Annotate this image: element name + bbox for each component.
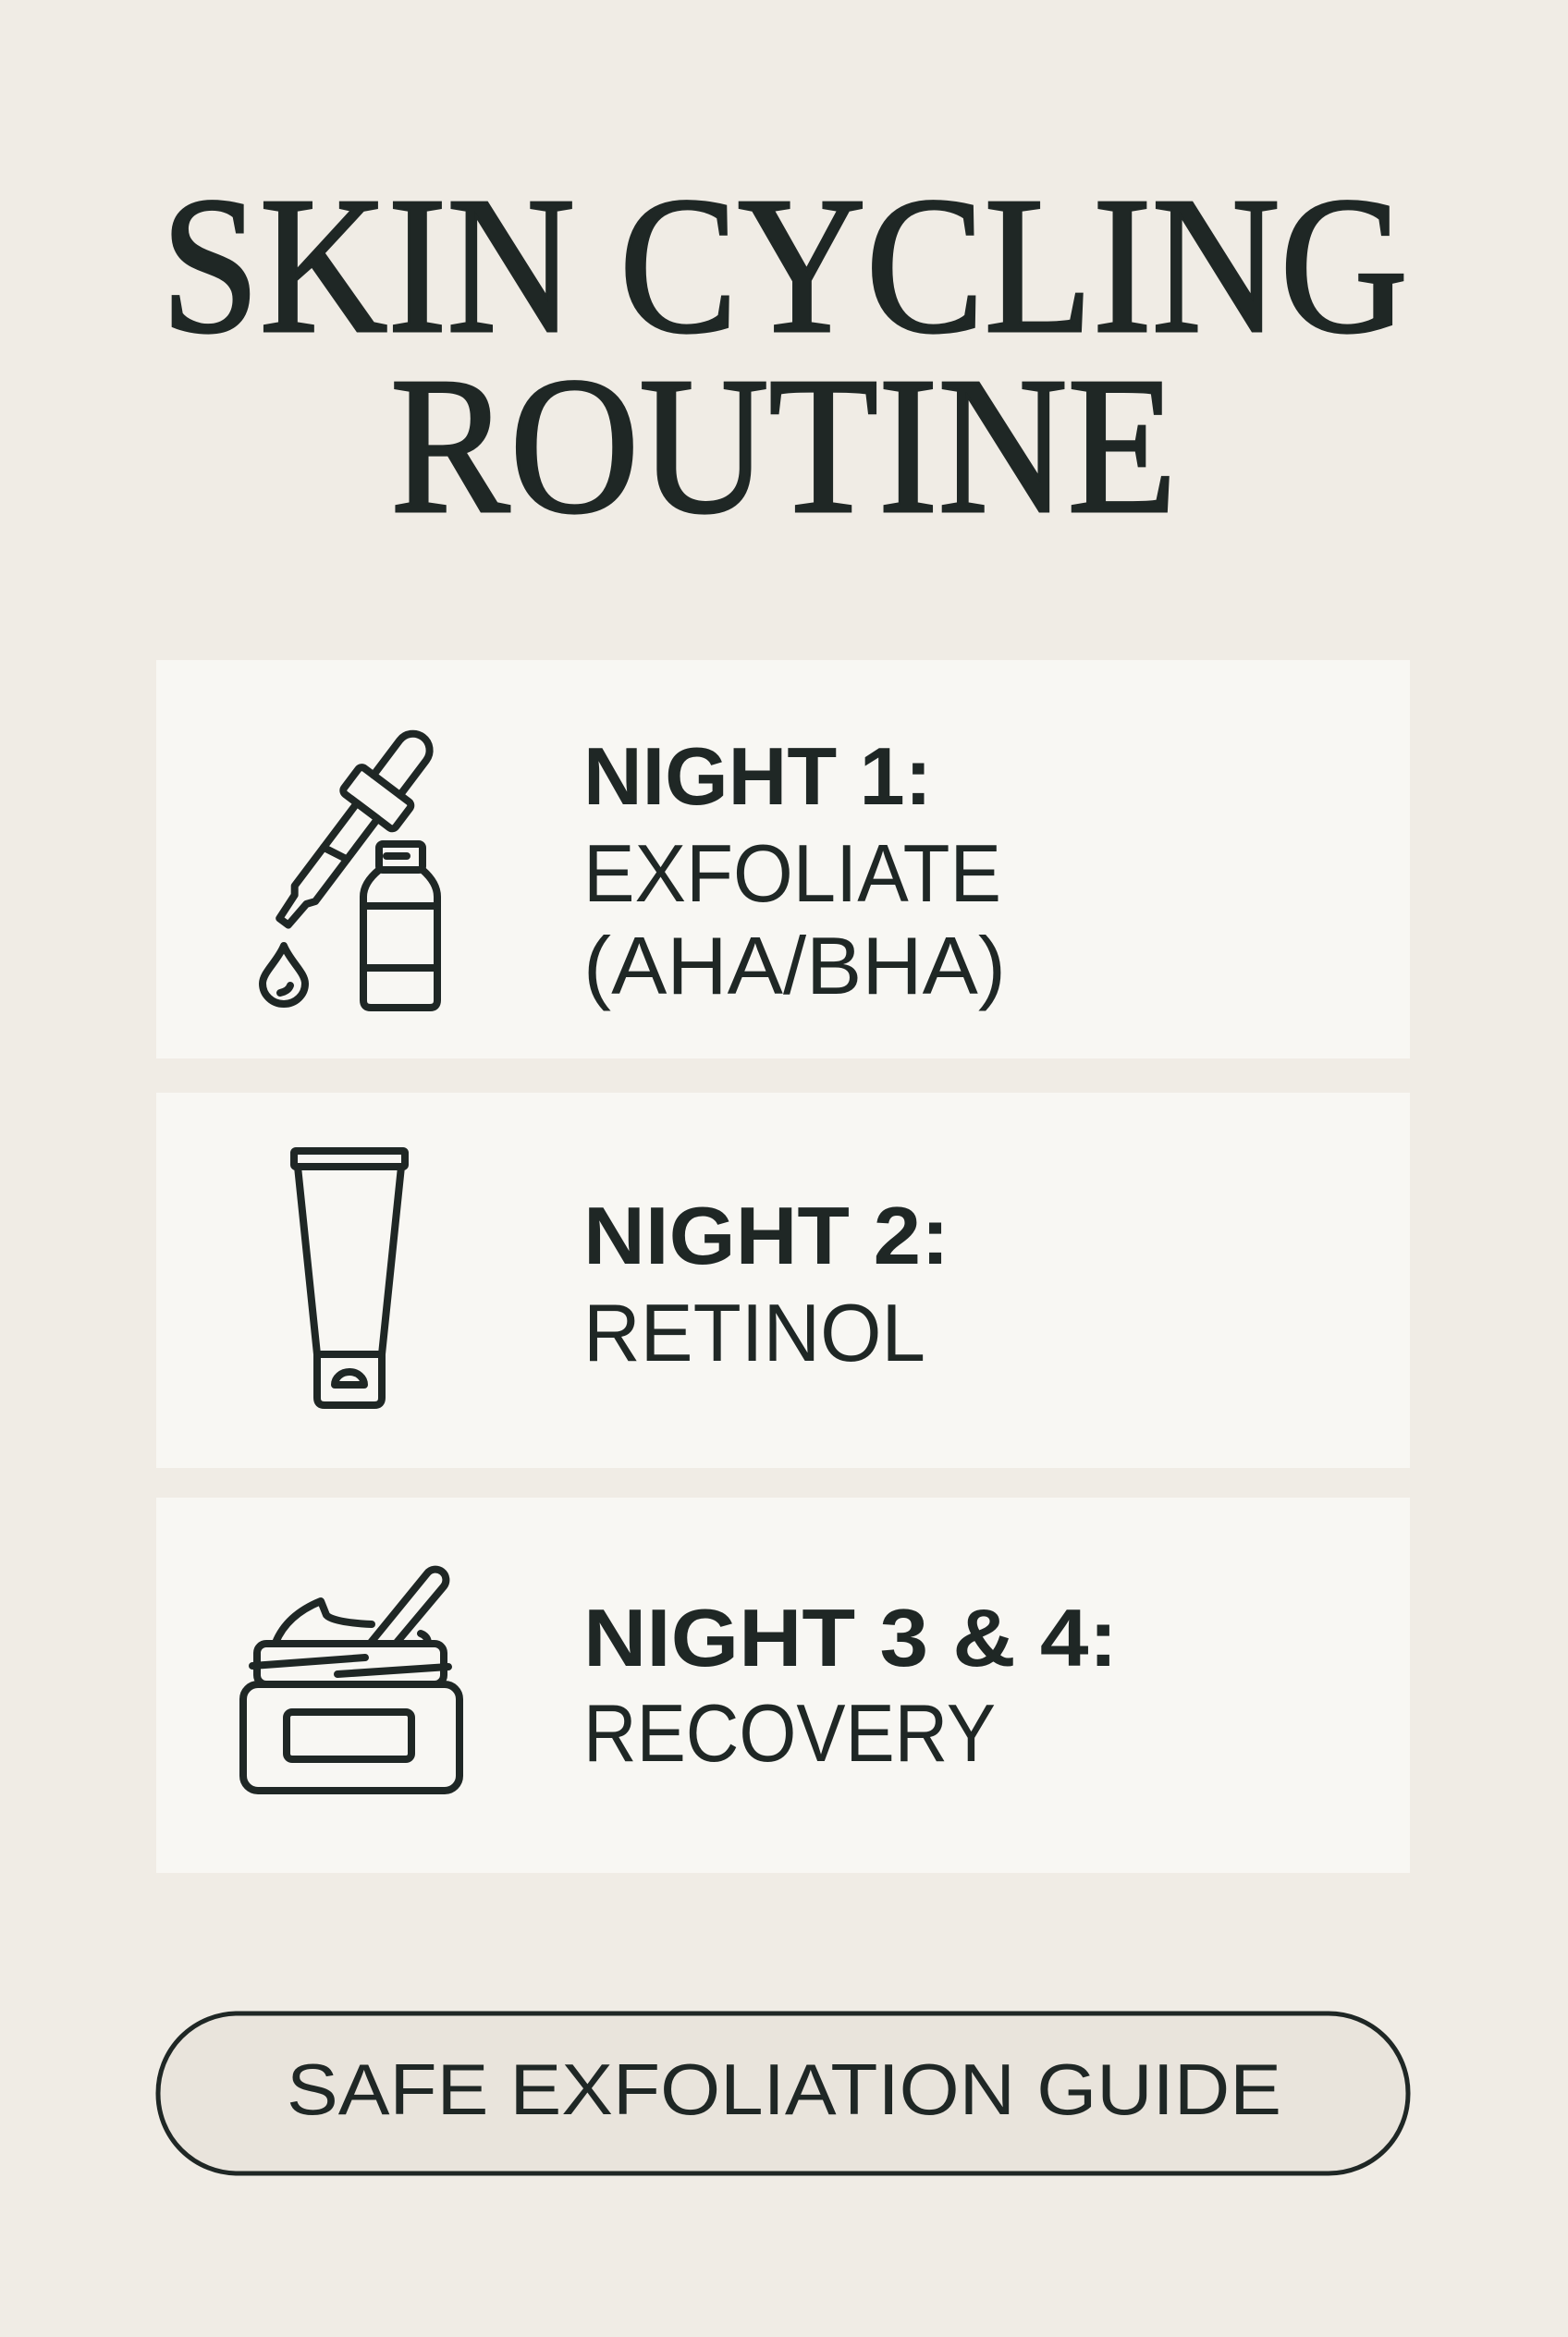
title: SKIN CYCLING xyxy=(161,156,1408,373)
text: night 1 xyxy=(583,730,1006,1011)
text: night 2: RETINOL xyxy=(583,1287,925,1378)
icon: dropper and bottle xyxy=(258,717,448,1008)
button: safe exfoliation guide: SAFE EXFOLIATION GUIDE xyxy=(287,2049,1281,2130)
text: night 3 & 4 xyxy=(583,1592,1118,1779)
text: night 2 xyxy=(583,1190,949,1378)
text: night 3 & 4: NIGHT 3 & 4: xyxy=(583,1592,1118,1683)
icon: tube xyxy=(294,1151,405,1405)
panel: night 3 & 4 xyxy=(156,1498,1410,1873)
text: night 1: (AHA/BHA) xyxy=(583,920,1006,1011)
text: night 1: EXFOLIATE xyxy=(583,827,1001,919)
panel: night 2 xyxy=(156,1093,1410,1468)
button: safe exfoliation guide xyxy=(158,2013,1408,2173)
text: night 2: NIGHT 2: xyxy=(583,1190,949,1281)
title xyxy=(161,156,1408,554)
title: ROUTINE xyxy=(390,336,1177,554)
text: night 1: NIGHT 1: xyxy=(583,730,932,822)
icon: cream jar xyxy=(243,1570,459,1791)
panel: night 1 xyxy=(156,660,1410,1058)
text: night 3 & 4: RECOVERY xyxy=(583,1687,996,1779)
